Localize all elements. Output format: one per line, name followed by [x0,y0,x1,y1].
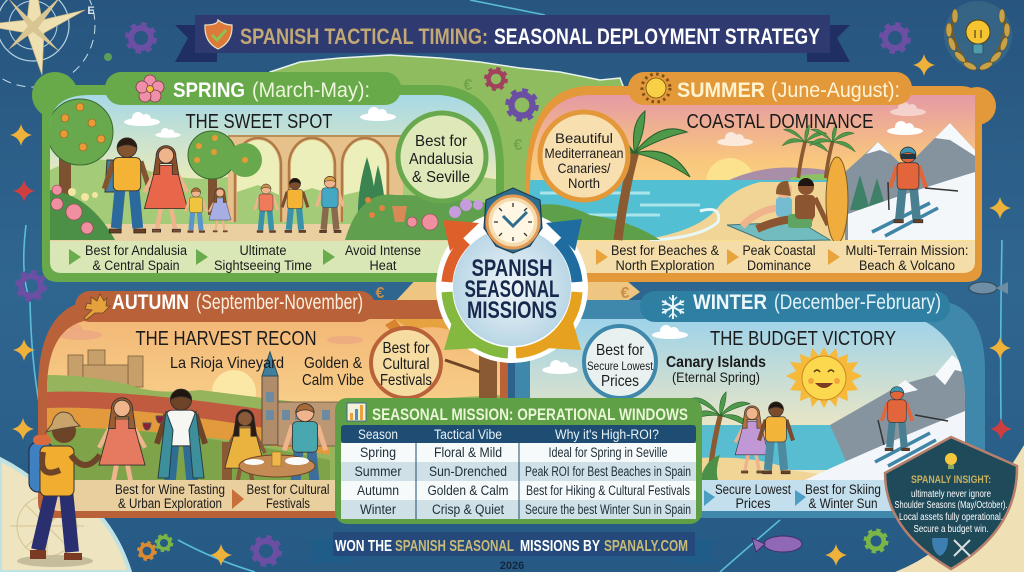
summer info strip [570,241,975,273]
summer strip items: Beach & Volcano [859,258,955,273]
canary islands label: (Eternal Spring) [672,369,760,385]
winter badge [584,326,656,398]
surfboard [826,157,848,243]
spring info strip [50,241,449,273]
euro symbols: € [621,285,630,302]
autumn scene [47,319,502,511]
autumn heading: (September-November) [196,291,363,314]
icon: snowflake [662,295,684,319]
title text: SPANISH TACTICAL TIMING: [240,24,488,49]
spring strip items [69,243,421,273]
winter info strip [700,480,960,511]
spring scene [47,95,500,273]
spring strip items: Best for Andalusia [85,243,187,258]
euro symbols: € [464,77,473,94]
table row: autumn: Golden & Calm [428,483,508,498]
mountains [845,123,975,240]
golden and calm label: Golden & [304,355,362,372]
sunbathers [727,178,830,241]
hub title: SEASONAL [464,276,560,303]
clock icon [484,188,542,253]
table row: autumn: Best for Hiking & Cultural Festivals [526,483,690,498]
table header [341,425,696,443]
insight text: Secure a budget win. [914,524,988,535]
table header: Why it's High-ROI? [555,427,659,442]
winter strip items: Best for Skiing [805,482,881,497]
winter heading: (December-February) [774,291,941,314]
table row: spring: Ideal for Spring in Seville [548,445,668,460]
summer badge: Mediterranean [544,145,624,161]
map of Spain [270,55,640,290]
autumn badge: Festivals [380,372,432,389]
sunset sun [706,158,752,180]
insight text: SPANALY INSIGHT: [911,474,991,486]
center hub [436,188,588,363]
hills [47,375,500,490]
smiling sun [786,347,862,408]
arrow ring: orange [443,220,479,282]
title text: SEASONAL DEPLOYMENT STRATEGY [494,24,820,49]
hub title [464,255,560,324]
la rioja label: La Rioja Vineyard [170,355,284,372]
table row: autumn [341,481,696,500]
spring subtitle: THE SWEET SPOT [186,111,332,133]
euro symbols [376,77,630,302]
table row: spring [341,443,696,462]
skier [872,147,958,236]
parchment compass [10,490,84,562]
parchment corner right [895,445,1024,572]
panel: winter [515,291,985,518]
diners [222,404,326,491]
hub title: SPANISH [472,255,552,282]
insight shield [885,437,1017,569]
golden and calm label: Calm Vibe [302,372,364,389]
canary islands label [666,354,766,385]
spring heading: SPRING [173,79,245,102]
hills [730,168,828,180]
traveler figure [17,412,100,567]
insight text [894,474,1008,535]
summer subtitle: COASTAL DOMINANCE [686,111,874,133]
winter badge: Best for [596,342,645,359]
summer strip items: Peak Coastal [742,243,816,258]
spring badge: Best for [415,133,468,150]
sea [530,180,827,238]
summer strip items: Dominance [747,258,811,273]
vineyard rows [47,392,330,480]
icon: compass rose: E [87,5,95,17]
arrow ring: gold [516,292,581,353]
table header: Season [358,427,398,442]
castle [68,350,143,387]
sand [656,182,845,240]
autumn heading [112,291,363,314]
autumn heading: AUTUMN [112,291,189,314]
spring strip items: Heat [370,258,397,273]
winter heading [693,291,941,314]
table row: summer: Summer [354,464,402,479]
summer header pill [628,72,912,105]
insight text: ultimately never ignore [911,489,991,500]
summer strip items: Best for Beaches & [611,243,719,258]
spring header pill [105,72,401,105]
table row: summer: Sun-Drenched [429,464,507,479]
spring strip items: Avoid Intense [345,243,421,258]
winter heading: WINTER [693,291,767,314]
winter mountains [830,355,978,470]
spring corner bulb [32,72,78,118]
hub title: MISSIONS [467,297,557,324]
summer strip items [596,243,968,273]
spring heading [173,79,370,102]
summer heading [677,79,900,102]
spring frame [42,85,504,282]
spring badge [398,113,486,201]
couple [735,402,793,474]
autumn header pill [75,291,375,322]
snow slope [805,405,980,480]
bottom banner [307,532,717,563]
icon: sun [642,74,670,102]
banner text [335,538,688,555]
autumn strip items: & Urban Exploration [118,496,222,511]
winter strip items [704,482,881,511]
path [50,224,448,241]
title text [240,24,820,49]
icon: shield and swords [932,538,970,556]
table row: winter: Crisp & Quiet [432,502,504,517]
banner text: MISSIONS BY [520,538,600,555]
panel: summer [525,72,996,282]
winter frame [515,300,985,518]
autumn subtitle: THE HARVEST RECON [136,328,316,350]
summer heading: SUMMER [677,79,765,102]
summer strip items: Multi-Terrain Mission: [846,243,968,258]
icon: shield check [205,20,232,49]
autumn strip items [115,482,330,511]
palm [689,392,752,480]
autumn badge: Best for [382,340,430,357]
beach [695,458,850,480]
canary islands label: Canary Islands [666,354,766,371]
winter header pill [640,291,950,322]
icon: compass rose [0,0,95,87]
summer scene [525,95,980,273]
clouds [542,325,688,374]
family [104,138,343,233]
icon: fish right [969,282,1008,294]
icon: purple fish [752,536,802,552]
clouds [124,107,396,138]
sea [690,425,880,470]
spring heading: (March-May): [252,79,370,102]
autumn badge: Cultural [382,356,430,373]
winter subtitle: THE BUDGET VICTORY [710,328,896,350]
sunset sun [212,370,256,397]
euro symbols: € [376,285,385,302]
banner text: SPANALY.COM [604,538,688,555]
spring badge: & Seville [412,169,470,186]
table row: spring: Floral & Mild [434,445,502,460]
winter badge: Secure Lowest [587,359,654,373]
icon: small bulb [945,453,957,469]
summer corner bulb [958,87,996,125]
town [262,352,340,446]
clouds [58,324,363,344]
winter strip items: & Winter Sun [808,496,878,511]
icon: bar chart [347,403,366,421]
summer badge [540,112,628,200]
banner text: WON THE [335,538,392,555]
autumn frame [38,300,508,518]
title banner [175,15,850,62]
wine tasters [99,389,205,491]
spring strip items: & Central Spain [92,258,180,273]
summer badge: Beautiful [555,130,613,146]
arrow ring: blue [546,219,582,282]
year: 2026 [500,560,524,572]
orange trees [47,99,262,215]
clouds [717,102,926,146]
table row: summer [341,462,696,481]
tan land patch [380,275,640,320]
summer heading: (June-August): [771,79,900,102]
winter badge: Prices [601,373,639,390]
arcade [228,135,403,222]
winter strip items: Secure Lowest [715,482,791,497]
summer strip items: North Exploration [616,258,714,273]
table header: Tactical Vibe [434,427,502,442]
palms [614,110,856,240]
flower beds [50,185,500,240]
icon: maple leaf [84,294,110,320]
autumn tree right [385,319,500,400]
autumn strip items: Festivals [266,496,310,511]
spring strip items: Sightseeing Time [214,258,312,273]
euro symbols: € [514,137,523,154]
golden and calm label [302,355,364,389]
table row: autumn: Autumn [357,483,399,498]
spring strip items: Ultimate [240,243,286,258]
autumn badge [371,328,441,398]
hills [50,160,496,224]
green dot [104,53,112,61]
panel: operational windows table [335,398,702,524]
table row: winter: Winter [360,502,396,517]
panel: autumn [38,291,508,518]
table row: winter: Secure the best Winter Sun in Spain [525,502,691,517]
banner text: SPANISH SEASONAL [395,538,514,555]
icon: spring flower [136,75,164,102]
winter scene [525,319,980,511]
autumn strip items: Best for Wine Tasting [115,482,225,497]
panel: spring [32,72,504,282]
winter strip items: Prices [736,496,771,511]
parchment corner left [0,459,130,572]
table title: SEASONAL MISSION: OPERATIONAL WINDOWS [372,405,688,424]
cypress trees [358,157,384,212]
snow slope [848,172,975,240]
green shrubs [530,204,660,240]
autumn strip items: Best for Cultural [246,482,330,497]
spring badge: Andalusia [409,151,473,168]
summer badge: North [568,175,600,191]
summer badge: Canaries/ [558,160,611,176]
arrow ring: green [444,292,508,353]
table row: spring: Spring [360,445,396,460]
skier [875,387,948,466]
table row: summer: Peak ROI for Best Beaches in Spain [525,464,691,479]
autumn info strip [47,480,342,511]
table row: winter [341,500,696,519]
summer frame [525,86,982,282]
icon: laurel and lightbulb [944,1,1012,72]
